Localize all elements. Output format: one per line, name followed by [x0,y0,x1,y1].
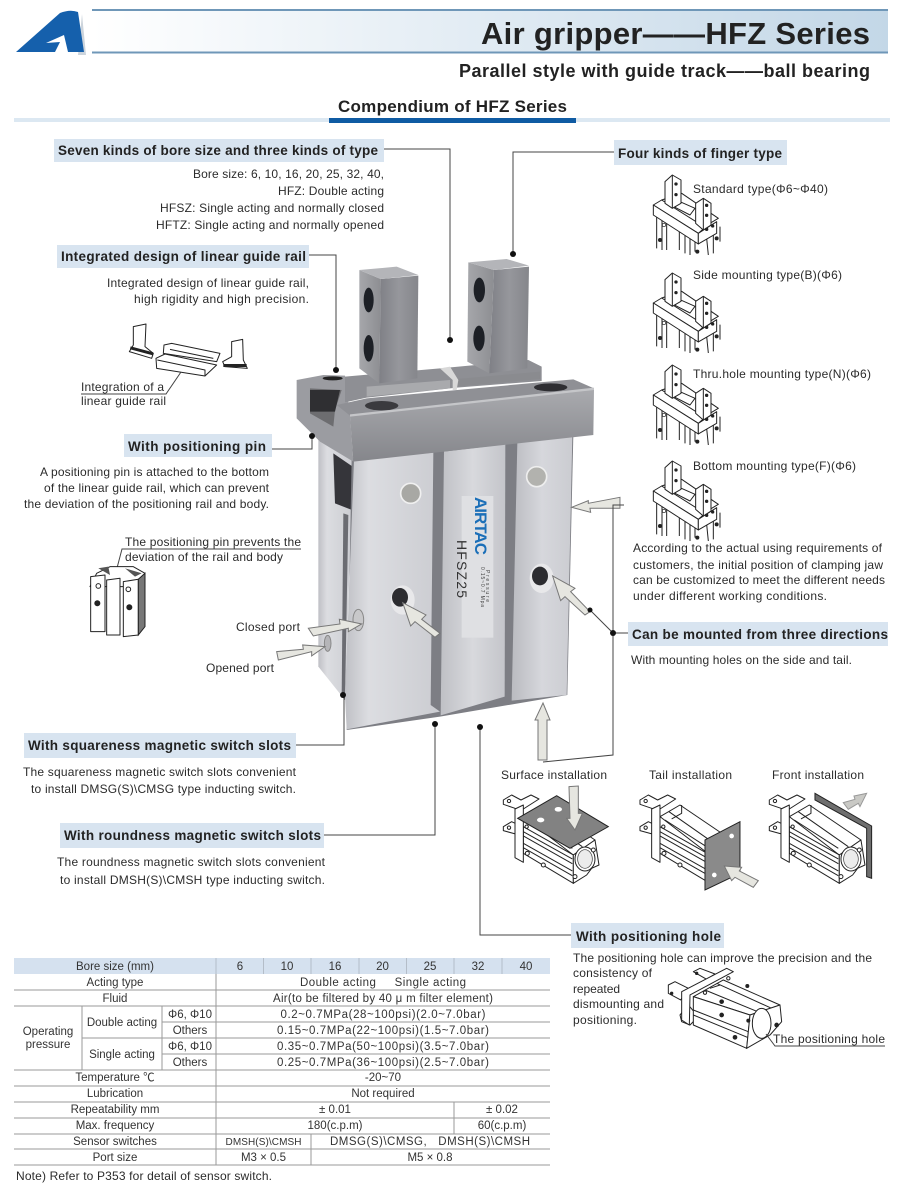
section heading: Compendium of HFZ Series [338,97,567,116]
subtitle: Parallel style with guide track——ball bearing [459,61,870,81]
arrows on photo [277,497,620,760]
top plate left block [297,375,353,462]
icon: linear guide rail parts [129,324,247,376]
icon: positioning hole gripper [668,968,782,1048]
callout: mounted from three directions: Can be mounted from three directions [632,627,888,642]
table: specifications: 60(c.p.m) [478,1120,526,1132]
section rule [14,118,890,123]
table: specifications: 180(c.p.m) [308,1120,363,1132]
table: specifications [14,958,550,1165]
icon: gripper with positioning pin [90,567,145,637]
callout: positioning pin note [117,535,301,568]
table: specifications: Others [173,1025,208,1037]
table header row: 20 [376,961,389,973]
table header row: Bore size (mm) [76,961,154,973]
table header row [14,958,550,974]
right finger [467,262,494,373]
callout: positioning pin note: The positioning pin prevents the [125,535,301,549]
callout: integrated design [57,245,339,373]
label: tail installation: Tail installation [649,768,732,782]
icon: side mounting finger type [653,273,720,353]
callout: squareness magnetic switch slots: The squareness magnetic switch slots convenient [23,765,297,779]
callout: positioning pin note: deviation of the rail and body [125,550,283,564]
callout: positioning hole: dismounting and [573,997,664,1011]
left front column [345,453,440,729]
text: finger customization note: customers, the initial position of clamping jaw [633,558,883,572]
logo: blue A [16,11,86,55]
product label text: 0.15~0.7 Mpa [479,567,485,607]
table header row: 6 [237,961,243,973]
callout: positioning hole: The positioning hole can improve the precision and the [573,951,872,965]
text: finger customization note [633,541,885,603]
icon: standard finger type [653,175,720,255]
callout: positioning pin: With positioning pin [128,439,266,454]
table: specifications: 0.2~0.7MPa(28~100psi)(2.0~7.0bar) [280,1009,486,1021]
callout: positioning hole [477,724,872,1027]
left finger [359,270,381,383]
table: specifications: pressure [26,1039,70,1051]
center column [441,444,505,715]
table: specifications: Not required [351,1088,415,1100]
table: specifications: Acting type [87,977,143,989]
table: specifications: DMSH(S)\CMSH [226,1137,302,1148]
callout: seven kinds of bore size: Seven kinds of bore size and three kinds of type [58,143,378,158]
callout: roundness magnetic switch slots: The roundness magnetic switch slots convenient [57,855,326,869]
callout: roundness magnetic switch slots: to install DMSH(S)\CMSH type inducting switch. [60,873,325,887]
table: specifications: 0.15~0.7MPa(22~100psi)(1.5~7.0bar) [277,1025,489,1037]
right column [512,437,572,701]
table: specifications: ± 0.02 [486,1104,518,1116]
callout: seven kinds of bore size: HFZ: Double acting [278,184,384,198]
callout: mounted from three directions [543,505,888,762]
table: specifications: Lubrication [87,1088,143,1100]
table: specifications: Port size [93,1152,137,1164]
table: specifications: M3 × 0.5 [241,1152,286,1164]
callout: squareness magnetic switch slots: With squareness magnetic switch slots [28,738,291,753]
callout: integrated design: Integrated design of linear guide rail, [107,276,309,290]
callout: positioning hole: positioning. [573,1013,637,1027]
icon: front installation [769,793,872,883]
table: specifications: M5 × 0.8 [407,1152,453,1164]
callout: positioning pin [24,433,315,511]
table: specifications: Φ6, Φ10 [168,1009,212,1021]
header band [92,9,888,54]
table: specifications: Φ6, Φ10 [168,1041,212,1053]
table: specifications: Double acting [87,1017,157,1029]
label: opened port: Opened port [206,661,275,675]
product label text: AIRTAC [471,497,490,555]
icon: tail installation [640,795,758,890]
callout: seven kinds of bore size: HFTZ: Single acting and normally opened [156,218,384,232]
body groove base [347,435,573,730]
table: specifications: Sensor switches [73,1136,157,1148]
callout: integrated design: Integrated design of linear guide rail [61,249,306,264]
left side column [318,438,353,700]
label: side mounting type: Side mounting type(B)(Φ6) [693,268,842,282]
table: specifications: -20~70 [365,1072,401,1084]
table: specifications: Fluid [103,993,127,1005]
table: specifications: DMSG(S)\CMSG, DMSH(S)\CMSH [330,1136,530,1148]
callout: four kinds of finger type: Four kinds of finger type [618,146,782,161]
callout: four kinds of finger type [510,140,787,257]
callout: integrated design: high rigidity and high precision. [134,292,309,306]
label: front installation: Front installation [772,768,864,782]
table header row: 10 [281,961,293,973]
table: specifications: 0.35~0.7MPa(50~100psi)(3.5~7.0bar) [277,1041,489,1053]
label: closed port: Closed port [236,620,301,634]
table: specifications: ± 0.01 [319,1104,351,1116]
callout: integration of a linear guide rail: linear guide rail [81,394,166,408]
table note: Note) Refer to P353 for detail of sensor switch. [16,1169,272,1183]
callout: seven kinds of bore size: HFSZ: Single acting and normally closed [160,201,384,215]
table: specifications: Single acting [89,1049,155,1061]
table: specifications: Repeatability mm [71,1104,159,1116]
table header row: 25 [424,961,436,973]
callout: positioning pin: the deviation of the positioning rail and body. [24,497,269,511]
text: finger customization note: According to the actual using requirements of [633,541,883,555]
callout: integration of a linear guide rail [81,372,181,408]
callout: roundness magnetic switch slots [57,721,438,887]
label: bottom mounting type: Bottom mounting type(F)(Φ6) [693,459,856,473]
title: Air gripper——HFZ Series [481,16,870,51]
callout: squareness magnetic switch slots [23,692,346,796]
label: standard type: Standard type(Φ6~Φ40) [693,182,828,196]
callout: integration of a linear guide rail: Integration of a [81,380,164,394]
guide rail [345,360,542,402]
table: specifications: 0.25~0.7MPa(36~100psi)(2.5~7.0bar) [277,1057,489,1069]
icon: thru-hole finger type [653,365,720,445]
table: specifications: Max. frequency [76,1120,155,1132]
panel: main product photo [297,259,594,730]
table header row: 16 [329,961,341,973]
callout: positioning hole: consistency of [573,966,653,980]
callout: positioning pin: A positioning pin is attached to the bottom [40,465,269,479]
label plate [462,496,493,638]
callout: the positioning hole label: The positioning hole [773,1032,885,1046]
table: specifications: Double acting Single acting [300,977,466,989]
table header row: 32 [472,961,484,973]
plugs and ports [401,483,421,503]
table: specifications: Air(to be filtered by 40 μ m filter element) [273,993,493,1005]
icon: surface installation [503,786,608,883]
label: surface installation: Surface installation [501,768,607,782]
table: specifications: Temperature ℃ [75,1072,155,1084]
callout: positioning hole: repeated [573,982,620,996]
callout: squareness magnetic switch slots: to install DMSG(S)\CMSG type inducting switch. [31,782,296,796]
icon: bottom mounting finger type [653,461,720,541]
product label text: HFSZ25 [454,540,470,598]
callout: seven kinds of bore size [54,139,453,343]
label: thru-hole mounting type: Thru.hole mounting type(N)(Φ6) [693,367,871,381]
text: finger customization note: can be customized to meet the different needs [633,573,885,587]
product label text: Pressure [484,570,490,602]
callout: seven kinds of bore size: Bore size: 6, 10, 16, 20, 25, 32, 40, [193,167,384,181]
callout: roundness magnetic switch slots: With roundness magnetic switch slots [64,828,321,843]
callout: positioning pin: of the linear guide rail, which can prevent [44,481,270,495]
table: specifications: Operating [23,1026,73,1038]
callout: mounted from three directions: With mounting holes on the side and tail. [631,653,852,667]
product label text [454,497,490,607]
top plate front [350,390,594,462]
top surface strip [337,379,594,416]
text: finger customization note: under different working conditions. [633,589,827,603]
table: specifications: Others [173,1057,208,1069]
callout: positioning hole: With positioning hole [576,929,721,944]
table header row: 40 [520,961,532,973]
